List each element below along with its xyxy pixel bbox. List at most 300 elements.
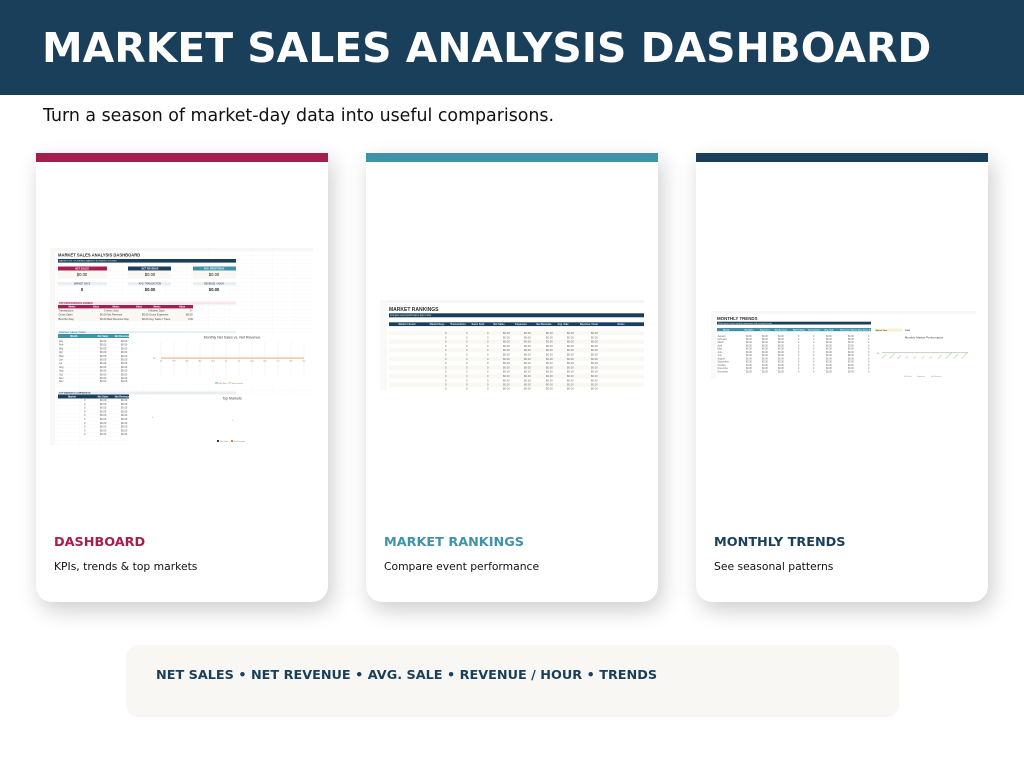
monthly table: $0.00 <box>762 352 768 354</box>
line chart: monthly market performance: Monthly Market Performance <box>905 336 944 340</box>
rankings table: $0.00 <box>567 365 574 369</box>
monthly table: October <box>718 364 726 367</box>
rankings table: $0.00 <box>591 335 598 339</box>
rankings table: 0 <box>445 374 447 378</box>
monthly table: January <box>718 335 727 338</box>
monthly table: 0 <box>798 358 800 360</box>
monthly table: $0.00 <box>778 362 784 364</box>
bar chart: top markets: 0 <box>232 420 234 422</box>
top performance table: Metric <box>68 306 76 308</box>
rankings table: 0 <box>445 378 447 382</box>
line chart: monthly net sales vs net revenue: Feb <box>172 360 176 362</box>
rankings table: $0.00 <box>546 331 553 335</box>
top markets table: TOP MARKETS COMPARISON <box>59 392 91 395</box>
KPI tiles <box>58 266 236 292</box>
line chart: monthly market performance: February <box>889 353 896 360</box>
monthly sales table: $0.00 <box>121 373 128 376</box>
rankings table: $0.00 <box>546 344 553 348</box>
line chart: monthly net sales vs net revenue: Aug <box>250 359 254 362</box>
KPI tiles: AVG. TRANSACTION <box>139 282 162 286</box>
line chart: monthly net sales vs net revenue: Apr <box>199 359 202 362</box>
top markets table: 0 <box>84 429 86 432</box>
spreadsheet screenshot: dashboard <box>55 248 313 444</box>
monthly sales table: $0.00 <box>121 351 128 354</box>
top markets table: $0.00 <box>121 414 128 417</box>
spreadsheet screenshot: dashboard: MARKET KPI • POWERED MARKET BUSINESS SYSTEM <box>59 260 117 263</box>
KPI tiles: $0.00 <box>209 287 220 292</box>
line chart: monthly market performance: August <box>937 353 943 360</box>
monthly sales table: $0.00 <box>100 355 107 358</box>
top performance table: Best Net Day <box>58 317 74 321</box>
rankings table: Transactions <box>450 323 466 326</box>
monthly table: $0.00 <box>762 339 768 341</box>
rankings table: $0.00 <box>591 365 598 369</box>
subtitle: Turn a season of market-day data into useful comparisons. <box>43 106 554 126</box>
rankings table: 0 <box>445 331 447 335</box>
top markets table: 0 <box>84 418 86 421</box>
rankings table: $0.00 <box>503 352 510 356</box>
monthly table: Transactions <box>808 328 821 331</box>
rankings table: 0 <box>445 361 447 365</box>
line chart: monthly market performance: Net Sales <box>904 375 912 378</box>
top performance table: Value <box>179 306 186 308</box>
card title: dashboard: DASHBOARD <box>54 535 145 550</box>
rankings table: $0.00 <box>503 344 510 348</box>
rankings table: $0.00 <box>567 383 574 387</box>
monthly table: November <box>718 367 728 370</box>
monthly table: June <box>718 352 723 354</box>
line chart: monthly net sales vs net revenue: Nov <box>289 360 293 362</box>
line chart: monthly market performance: May <box>913 356 917 360</box>
rankings table: $0.00 <box>546 348 553 352</box>
top markets table: $0.00 <box>121 410 128 413</box>
monthly table: $0.00 <box>826 368 832 370</box>
monthly table: Net Revenue <box>775 328 788 331</box>
monthly table: 0 <box>813 352 815 354</box>
monthly table: Avg. Sale <box>824 328 834 331</box>
rankings table: 0 <box>466 331 468 335</box>
rankings table: 0 <box>466 340 468 344</box>
top markets table: $0.00 <box>100 410 107 413</box>
rankings table: Market / Event <box>399 323 416 326</box>
monthly table: 0 <box>798 349 800 351</box>
rankings table: $0.00 <box>524 383 531 387</box>
monthly table: $0.00 <box>826 346 832 348</box>
top markets table: Net Sales <box>98 395 109 398</box>
line chart: monthly market performance: January <box>881 354 887 360</box>
top markets table: $0.00 <box>121 429 128 432</box>
spreadsheet screenshot: dashboard: MARKET SALES ANALYSIS DASHBOARD <box>58 252 140 258</box>
panel: monthly trends <box>696 153 988 602</box>
rankings table: 0 <box>487 335 489 339</box>
line chart: monthly market performance: November <box>961 352 969 360</box>
top performance table: Value <box>93 306 100 308</box>
rankings table: $0.00 <box>591 340 598 344</box>
rankings table: $0.00 <box>503 348 510 352</box>
monthly table: $0.00 <box>778 336 784 338</box>
monthly table: 0 <box>868 342 870 344</box>
rankings table: $0.00 <box>524 335 531 339</box>
rankings table: $0.00 <box>591 374 598 378</box>
KPI tiles: $0.00 <box>145 272 156 277</box>
rankings table: $0.00 <box>567 357 574 361</box>
monthly table: 0 <box>813 372 815 374</box>
rankings table: $0.00 <box>503 383 510 387</box>
rankings table: Revenue / Hour <box>580 323 598 326</box>
top markets table: $0.00 <box>100 414 107 417</box>
monthly table: 0 <box>868 346 870 348</box>
top performance table: $0.00 Gross Expenses <box>142 313 169 317</box>
line chart: monthly net sales vs net revenue: Oct <box>277 359 280 362</box>
top markets table: $0.00 <box>100 407 107 410</box>
monthly sales table: Sep <box>59 370 64 373</box>
monthly sales table: Apr <box>59 351 63 354</box>
rankings table: $0.00 <box>546 383 553 387</box>
monthly sales table: Feb <box>59 344 64 347</box>
rankings table: 0 <box>466 378 468 382</box>
rankings table: $0.00 <box>567 331 574 335</box>
monthly table: 0 <box>868 368 870 370</box>
KPI tiles: REVENUE / HOUR <box>204 284 224 286</box>
monthly table: $0.00 <box>762 358 768 360</box>
monthly table <box>717 328 874 374</box>
line chart: monthly net sales vs net revenue: Jul <box>238 360 241 362</box>
monthly table: 0 <box>813 336 815 338</box>
top markets table: Net Revenue <box>115 395 130 398</box>
monthly sales table: $0.00 <box>121 366 128 369</box>
top markets table: 0 <box>84 407 86 410</box>
monthly table: $0.00 <box>746 352 752 354</box>
rankings table: $0.00 <box>503 387 510 391</box>
monthly table: $0.00 <box>762 372 768 374</box>
year selector: Select Year <box>876 329 887 332</box>
top performance table: $0.00 <box>186 313 193 317</box>
line chart: monthly net sales vs net revenue: Monthly Net Sales vs. Net Revenue <box>204 336 260 340</box>
rankings table: 0 <box>466 383 468 387</box>
top markets table: $0.00 <box>121 418 128 421</box>
rankings table: 0 <box>445 383 447 387</box>
top markets table: Market <box>68 395 76 398</box>
KPI tiles: $0.00 <box>209 272 220 277</box>
monthly table: $0.00 <box>848 372 854 374</box>
line chart: monthly market performance <box>877 336 969 378</box>
monthly table: $0.00 <box>778 339 784 341</box>
line chart: monthly net sales vs net revenue: Jan <box>159 360 163 362</box>
rankings table: $0.00 <box>524 370 531 374</box>
rankings table: $0.00 <box>591 352 598 356</box>
metrics list: NET SALES • NET REVENUE • AVG. SALE • REVENUE / HOUR • TRENDS <box>156 668 657 683</box>
top markets table: $0.00 <box>100 433 107 436</box>
monthly table: $0.00 <box>778 368 784 370</box>
monthly sales table: $0.00 <box>121 370 128 373</box>
monthly table: $0.00 <box>746 355 752 357</box>
monthly table: Month <box>723 328 730 331</box>
top performance table <box>58 302 236 322</box>
monthly sales table: Month <box>70 335 78 338</box>
title: MARKET SALES ANALYSIS DASHBOARD <box>42 24 931 72</box>
rankings table: $0.00 <box>567 387 574 391</box>
monthly table: 0 <box>798 346 800 348</box>
top performance table: 0.00 <box>188 317 194 321</box>
monthly table: $0.00 <box>762 336 768 338</box>
panel: market rankings <box>366 153 658 602</box>
monthly table: $0.00 <box>848 346 854 348</box>
rankings table: Avg. Sale <box>557 323 569 326</box>
top markets table: $0.00 <box>100 426 107 429</box>
monthly sales table: $0.00 <box>100 380 107 383</box>
rankings table: $0.00 <box>567 370 574 374</box>
rankings table: $0.00 <box>591 348 598 352</box>
monthly sales table: $0.00 <box>100 347 107 350</box>
rankings table: 0 <box>487 352 489 356</box>
rankings table: $0.00 <box>546 361 553 365</box>
monthly table: $0.00 <box>746 339 752 341</box>
line chart: monthly market performance: March <box>897 355 902 360</box>
top markets table: $0.00 <box>121 426 128 429</box>
card description: monthly trends: See seasonal patterns <box>714 560 833 573</box>
rankings table: $0.00 <box>567 348 574 352</box>
monthly table: 0 <box>868 365 870 367</box>
top performance table: 0 <box>190 309 192 313</box>
monthly sales table: Jan <box>59 340 64 343</box>
rankings table: $0.00 <box>524 378 531 382</box>
rankings table: $0.00 <box>503 361 510 365</box>
line chart: monthly market performance: September <box>945 351 953 360</box>
rankings table: 0 <box>445 340 447 344</box>
rankings table <box>389 322 644 391</box>
top markets table: $0.00 <box>100 403 107 406</box>
rankings table: 0 <box>487 374 489 378</box>
top performance table: $0.00 Best Revenue Day <box>100 317 130 321</box>
monthly table: Market Days <box>793 328 806 331</box>
monthly table: Revenue / Market Day <box>840 328 863 331</box>
rankings table: $0.00 <box>591 344 598 348</box>
monthly table: $0.00 <box>826 352 832 354</box>
rankings table: $0.00 <box>524 331 531 335</box>
line chart: monthly net sales vs net revenue <box>130 333 313 387</box>
top performance table: Value <box>136 306 143 308</box>
monthly table: $0.00 <box>746 362 752 364</box>
top markets table: $0.00 <box>121 422 128 425</box>
KPI tiles: $0.00 <box>77 272 88 277</box>
panel: dashboard <box>36 153 328 602</box>
monthly sales table: $0.00 <box>100 358 107 362</box>
rankings table: $0.00 <box>503 357 510 361</box>
monthly table: $0.00 <box>826 365 832 367</box>
top performance table: TOP PERFORMANCE RANKED <box>59 302 93 305</box>
bar chart: top markets <box>130 394 313 444</box>
top markets table: 0 <box>84 426 86 429</box>
monthly table: $0.00 <box>762 346 768 348</box>
line chart: monthly net sales vs net revenue: Mar <box>185 359 189 362</box>
rankings table: 0 <box>466 348 468 352</box>
rankings table: $0.00 <box>567 374 574 378</box>
monthly table: April <box>718 344 723 348</box>
top markets table: $0.00 <box>121 399 128 402</box>
rankings table: $0.00 <box>524 361 531 365</box>
top markets table: 0 <box>84 414 86 417</box>
spreadsheet screenshot: market rankings: MARKET RANKINGS <box>389 307 439 313</box>
rankings table: 0 <box>466 335 468 339</box>
top markets table: 0 <box>84 403 86 406</box>
monthly sales table: $0.00 <box>121 340 128 343</box>
monthly table: $0.00 <box>826 342 832 344</box>
rankings table: Items Sold <box>472 323 485 326</box>
monthly sales table: Dec <box>59 380 64 383</box>
rankings table: $0.00 <box>546 378 553 382</box>
monthly table: $0.00 <box>762 362 768 364</box>
monthly table: $0.00 <box>778 372 784 374</box>
monthly sales table: $0.00 <box>100 373 107 376</box>
monthly table: 0 <box>868 349 870 351</box>
monthly table: 0 <box>813 346 815 348</box>
rankings table: 0 <box>445 348 447 352</box>
monthly table: 0 <box>798 342 800 344</box>
rankings table: 0 <box>466 370 468 374</box>
monthly table: 0 <box>813 365 815 367</box>
monthly table: $0.00 <box>778 342 784 344</box>
rankings table: 0 <box>487 348 489 352</box>
monthly table: $0.00 <box>848 342 854 344</box>
rankings table: Market Days <box>430 323 445 326</box>
monthly table: $0.00 <box>746 372 752 374</box>
monthly sales table: Nov <box>59 377 64 380</box>
line chart: monthly market performance: Net Revenue <box>931 375 942 378</box>
monthly sales table: $0.00 <box>100 340 107 343</box>
year selector: 2026 <box>905 330 911 332</box>
monthly table: 0 <box>868 336 870 338</box>
card title: market rankings: MARKET RANKINGS <box>384 535 524 550</box>
KPI tiles: AVG. PROFIT/DAY <box>204 267 225 270</box>
monthly table: 0 <box>813 362 815 364</box>
line chart: monthly market performance: July <box>929 356 933 360</box>
monthly table: December <box>718 370 728 374</box>
rankings table: 0 <box>445 387 447 391</box>
rankings table: $0.00 <box>546 365 553 369</box>
monthly sales table: $0.00 <box>121 358 128 362</box>
KPI tiles: $0.00 <box>145 287 156 292</box>
rankings table: $0.00 <box>503 378 510 382</box>
spreadsheet screenshot: monthly trends: MONTHLY TRENDS <box>717 316 758 321</box>
monthly table: $0.00 <box>746 336 752 338</box>
monthly table: $0.00 <box>826 362 832 364</box>
accent bar: market rankings <box>366 153 658 162</box>
rankings table: $0.00 <box>524 387 531 391</box>
rankings table: $0.00 <box>567 352 574 356</box>
rankings table: $0.00 <box>546 352 553 356</box>
monthly table: $0.00 <box>762 365 768 367</box>
top markets table: 0 <box>84 433 86 436</box>
monthly sales table: May <box>59 355 64 358</box>
top markets table: $0.00 <box>100 429 107 432</box>
monthly table: $0.00 <box>848 349 854 351</box>
monthly sales table: $0.00 <box>121 380 128 383</box>
line chart: monthly market performance: Expenses <box>917 376 925 378</box>
monthly table: 0 <box>868 362 870 364</box>
rankings table: 0 <box>466 352 468 356</box>
bar chart: top markets: Net Revenue <box>234 440 245 443</box>
monthly table: $0.00 <box>778 355 784 357</box>
monthly table: 0 <box>798 362 800 364</box>
monthly table: $0.00 <box>762 349 768 351</box>
rankings table: Net Revenue <box>536 323 552 326</box>
monthly table: Expenses <box>760 329 771 331</box>
line chart: monthly net sales vs net revenue: Jun <box>224 360 228 362</box>
spreadsheet screenshot: monthly trends <box>716 311 976 378</box>
top performance table: Transactions <box>58 309 74 313</box>
rankings table: $0.00 <box>567 361 574 365</box>
top performance table: 0 Items Sold <box>104 309 119 313</box>
monthly table: $0.00 <box>778 365 784 367</box>
rankings table: $0.00 <box>591 387 598 391</box>
top performance table: 0 Market Days <box>148 309 165 313</box>
monthly sales table: $0.00 <box>121 362 128 365</box>
monthly table: 0 <box>868 352 870 354</box>
rankings table: $0.00 <box>591 331 598 335</box>
header banner <box>0 0 1024 95</box>
top performance table: Gross Sales <box>58 313 73 317</box>
rankings table: 0 <box>487 331 489 335</box>
rankings table: $0.00 <box>524 365 531 369</box>
monthly table: 0 <box>798 365 800 367</box>
rankings table: Net Sales <box>493 323 505 326</box>
rankings table: 0 <box>487 365 489 369</box>
monthly sales table: $0.00 <box>121 355 128 358</box>
monthly sales table: Aug <box>59 366 64 369</box>
monthly table: March <box>718 341 725 344</box>
monthly table: 0 <box>868 355 870 357</box>
rankings table: $0.00 <box>591 370 598 374</box>
monthly table: $0.00 <box>826 336 832 338</box>
monthly table: 0 <box>813 368 815 370</box>
rankings table: $0.00 <box>503 331 510 335</box>
year selector <box>875 329 911 332</box>
rankings table: $0.00 <box>503 370 510 374</box>
rankings table: 0 <box>487 344 489 348</box>
rankings table: $0.00 <box>591 357 598 361</box>
line chart: monthly market performance: April <box>905 355 910 360</box>
rankings table: 0 <box>445 370 447 374</box>
monthly table: 0 <box>813 358 815 360</box>
rankings table: Notes <box>618 323 625 326</box>
monthly table: 0 <box>798 372 800 374</box>
monthly sales table: $0.00 <box>100 344 107 347</box>
rankings table: 0 <box>487 340 489 344</box>
monthly table: 0 <box>813 342 815 344</box>
rankings table: 0 <box>445 365 447 369</box>
monthly sales table: $0.00 <box>100 351 107 354</box>
monthly sales table: $0.00 <box>121 344 128 347</box>
monthly table: $0.00 <box>746 346 752 348</box>
top performance table: Metric <box>112 306 120 308</box>
monthly table: $0.00 <box>848 358 854 360</box>
rankings table: $0.00 <box>567 378 574 382</box>
monthly sales table: Mar <box>59 347 63 350</box>
rankings table: $0.00 <box>503 374 510 378</box>
rankings table: $0.00 <box>546 340 553 344</box>
monthly table: 0 <box>868 372 870 374</box>
monthly table: 0 <box>798 355 800 357</box>
top markets table: 0 <box>84 422 86 425</box>
rankings table: $0.00 <box>524 344 531 348</box>
rankings table: $0.00 <box>524 340 531 344</box>
rankings table: $0.00 <box>546 357 553 361</box>
monthly table: 0 <box>813 355 815 357</box>
monthly sales table: $0.00 <box>121 347 128 350</box>
monthly table: $0.00 <box>762 355 768 357</box>
monthly table: 0 <box>798 368 800 370</box>
monthly table: $0.00 <box>848 365 854 367</box>
